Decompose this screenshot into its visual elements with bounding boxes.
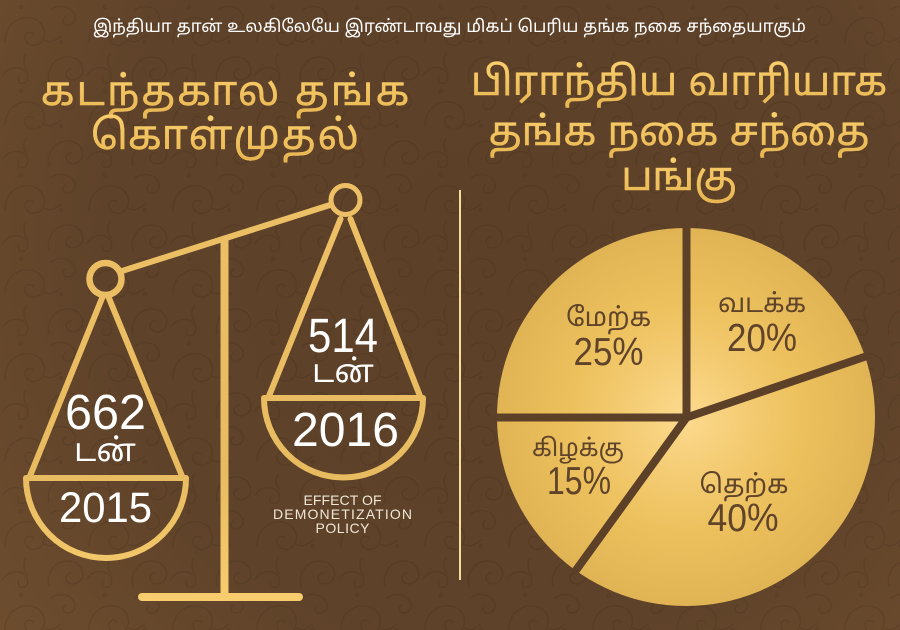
heading: regional market share: தங்க நகை சந்தை xyxy=(489,110,869,158)
pie label: south: தெற்க xyxy=(700,469,788,502)
scale beam xyxy=(122,205,330,271)
pie label: north: வடக்க xyxy=(718,288,806,318)
left pan labels: டன் xyxy=(74,432,136,468)
pie label: south xyxy=(700,469,788,540)
pie label: east xyxy=(532,435,624,503)
heading: past gold purchases: கொள்முதல் xyxy=(91,112,361,162)
left pan labels xyxy=(59,386,152,532)
pie chart xyxy=(490,222,875,606)
slice separators xyxy=(490,222,870,573)
right pan labels: 514 xyxy=(308,310,378,363)
right ring xyxy=(331,186,360,214)
left pan labels: 662 xyxy=(65,386,146,440)
right pan labels: 2016 xyxy=(292,404,399,457)
pie label: east: 15% xyxy=(547,460,611,503)
scale post xyxy=(220,238,228,597)
heading: past gold purchases: கடந்தகால தங்க xyxy=(41,68,411,118)
demonetization note: EFFECT OF xyxy=(304,492,382,508)
demonetization note: DEMONETIZATION xyxy=(273,506,412,522)
heading: past gold purchases xyxy=(41,68,411,162)
balance scale xyxy=(26,186,423,597)
demonetization note xyxy=(273,492,412,536)
left pan labels: 2015 xyxy=(59,484,152,532)
heading: regional market share: பங்கு xyxy=(621,155,737,203)
scale base xyxy=(142,593,299,601)
pie label: west: மேற்க xyxy=(566,302,651,335)
top headline: இந்தியா தான் உலகிலேயே இரண்டாவது மிகப் பெரிய தங்க நகை சந்தையாகும் xyxy=(93,17,806,38)
heading: regional market share xyxy=(471,60,887,203)
pie label: north xyxy=(718,288,806,360)
left pan xyxy=(26,297,186,558)
divider xyxy=(459,190,461,580)
pie label: east: கிழக்கு xyxy=(532,435,624,464)
pie label: west: 25% xyxy=(574,331,644,374)
demonetization note: POLICY xyxy=(316,520,370,536)
pie label: south: 40% xyxy=(708,497,778,540)
right pan labels: டன் xyxy=(312,353,374,389)
pie label: north: 20% xyxy=(727,317,797,360)
right pan labels xyxy=(292,310,399,457)
pie label: west xyxy=(566,302,651,374)
heading: regional market share: பிராந்திய வாரியாக xyxy=(471,60,887,108)
right pan xyxy=(264,219,423,477)
left ring xyxy=(90,263,122,295)
